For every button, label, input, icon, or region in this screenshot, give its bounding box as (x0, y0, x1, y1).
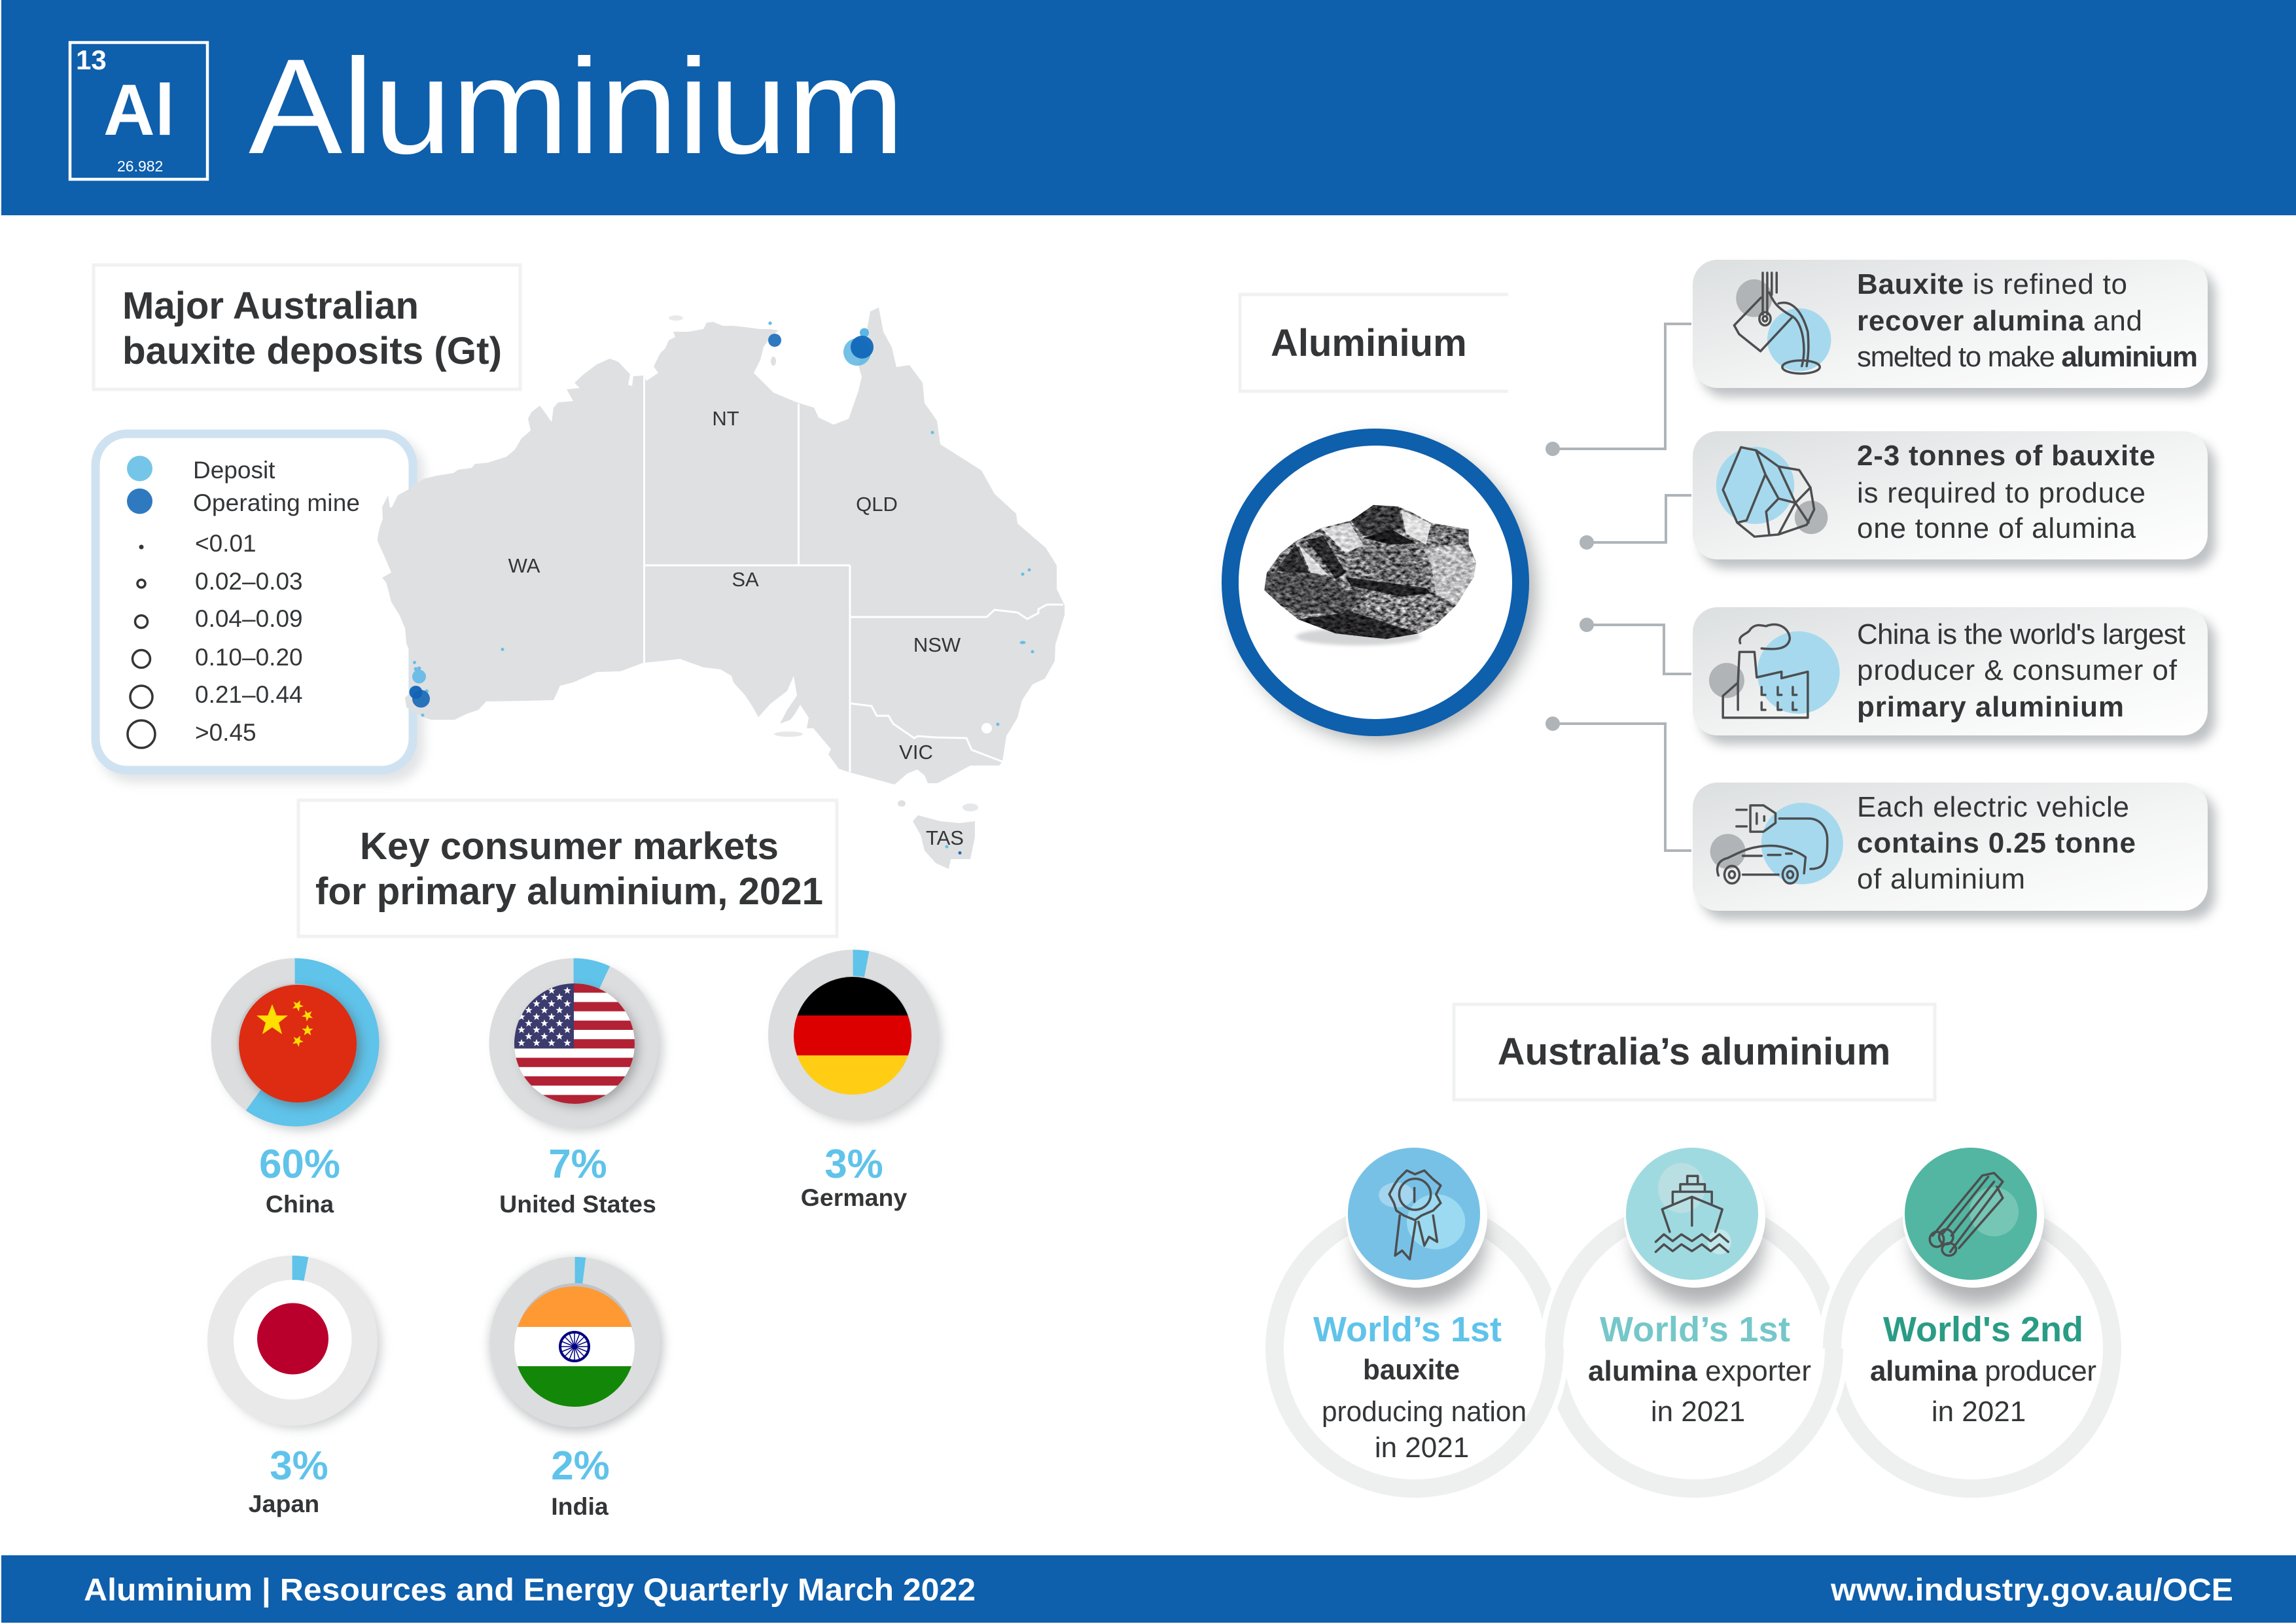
donut: China 60%: China (266, 1190, 334, 1218)
donut: United States 7%: United States (499, 1190, 656, 1218)
periodic table element box: Al (103, 70, 175, 150)
flag: China (239, 985, 357, 1103)
card: China largest: primary aluminium (1857, 691, 2124, 723)
deposit markers (410, 321, 1034, 855)
card: electric vehicle: of aluminium (1857, 863, 2025, 895)
stat: alumina exporter: World’s 1st (1600, 1310, 1790, 1349)
legend panel: 0.10–0.20 (195, 644, 303, 671)
state labels: QLD (856, 493, 898, 516)
flag: India (514, 1286, 635, 1407)
stat: alumina exporter (1588, 1146, 1811, 1428)
icon: aluminium tubes (1930, 1173, 2019, 1256)
donut: Japan 3%: 3% (270, 1443, 328, 1489)
donut: Germany 3%: 3% (824, 1142, 883, 1187)
heading: major Australian bauxite deposits: bauxite deposits (Gt) (122, 330, 502, 372)
card: bauxite refined: Bauxite is refined to (1857, 268, 2127, 300)
heading: key consumer markets: Key consumer markets (360, 825, 779, 868)
donut: Japan 3%: Japan (249, 1490, 319, 1517)
flag: United States (514, 983, 635, 1104)
flag: Japan (257, 1303, 328, 1374)
state labels: NT (712, 407, 739, 430)
periodic table element box (70, 43, 207, 179)
heading: major Australian bauxite deposits: Major Australian (122, 285, 419, 327)
card: bauxite refined (1693, 260, 2216, 397)
stat: bauxite producer: bauxite (1363, 1354, 1460, 1386)
card: China largest: China is the world's largest (1857, 618, 2185, 650)
stat: alumina producer: World's 2nd (1883, 1310, 2083, 1349)
connectors (1545, 324, 1691, 851)
heading: key consumer markets: for primary aluminium, 2021 (315, 870, 823, 913)
stat: bauxite producer (1313, 1146, 1527, 1464)
donut: United States 7%: 7% (548, 1142, 607, 1187)
stat: bauxite producer: World’s 1st (1313, 1310, 1502, 1349)
donut: India 2% (490, 1259, 663, 1520)
periodic table element box: 26.982 (117, 158, 163, 175)
header band (1, 0, 2296, 215)
heading: Aluminium: Aluminium (1271, 322, 1467, 364)
legend panel: Operating mine (193, 489, 360, 516)
legend panel (96, 434, 424, 783)
stat: bauxite producer: in 2021 (1375, 1432, 1469, 1464)
stat: alumina producer: alumina producer (1870, 1355, 2096, 1387)
stat: alumina producer: in 2021 (1932, 1396, 2026, 1428)
heading: key consumer markets (298, 800, 837, 936)
card: tonnes of bauxite: one tonne of alumina (1857, 512, 2136, 544)
state labels: WA (508, 554, 540, 577)
legend panel: 0.21–0.44 (195, 681, 303, 708)
donut: United States 7% (497, 965, 663, 1218)
footer band (1, 1555, 2296, 1623)
icon: factory (1709, 624, 1840, 718)
icon: ribbon (1379, 1171, 1465, 1260)
donut: Japan 3% (215, 1262, 381, 1517)
state labels (508, 407, 964, 849)
footer band: www.industry.gov.au/OCE (1830, 1573, 2233, 1608)
legend panel: 0.04–0.09 (195, 605, 303, 632)
legend panel: 0.02–0.03 (195, 568, 303, 595)
stat: bauxite producer: producing nation (1322, 1396, 1527, 1428)
state labels: NSW (913, 633, 961, 656)
card: electric vehicle (1693, 783, 2216, 920)
legend panel: Deposit (193, 457, 275, 484)
card: bauxite refined: smelted to make aluminium (1857, 341, 2198, 373)
icon: plug and car (1710, 803, 1843, 885)
icon: rock (1716, 447, 1828, 537)
card: tonnes of bauxite (1693, 431, 2216, 569)
title: Aluminium (249, 31, 904, 182)
map of Australia (378, 308, 1065, 869)
state labels: VIC (899, 741, 933, 764)
legend panel: <0.01 (195, 530, 256, 557)
card: tonnes of bauxite: 2-3 tonnes of bauxite (1857, 440, 2155, 472)
card: China largest (1693, 607, 2216, 745)
footer band: Aluminium | Resources and Energy Quarterly March 2022 (84, 1573, 976, 1608)
rock photo (1264, 505, 1476, 645)
heading: Australia's aluminium: Australia’s aluminium (1498, 1031, 1890, 1073)
icon: pouring crucible (1734, 273, 1831, 374)
icon: ship (1655, 1163, 1731, 1254)
card: electric vehicle: contains 0.25 tonne (1857, 827, 2136, 859)
heading: Australia's aluminium (1454, 1004, 1935, 1100)
donut: India 2%: India (551, 1492, 609, 1520)
aluminium rock in blue ring (1230, 437, 1536, 743)
heading: major Australian bauxite deposits (94, 265, 520, 389)
card: China largest: producer & consumer of (1857, 654, 2178, 686)
donut: China 60% (219, 964, 385, 1218)
card: bauxite refined: recover alumina and (1857, 305, 2142, 337)
stat: alumina exporter: alumina exporter (1588, 1355, 1811, 1387)
donut: Germany 3% (775, 957, 942, 1211)
stat: alumina exporter: in 2021 (1651, 1396, 1745, 1428)
legend panel: >0.45 (195, 719, 256, 746)
donut: China 60%: 60% (259, 1142, 340, 1187)
periodic table element box: 13 (76, 44, 107, 75)
stat: alumina producer (1870, 1146, 2096, 1428)
donut: India 2%: 2% (551, 1443, 610, 1489)
card: electric vehicle: Each electric vehicle (1857, 791, 2129, 823)
donut: Germany 3%: Germany (801, 1184, 907, 1211)
state labels: TAS (926, 826, 964, 849)
interlocking rings (1275, 1209, 2112, 1489)
heading: Aluminium (1240, 294, 1508, 391)
state labels: SA (732, 568, 759, 591)
card: tonnes of bauxite: is required to produce (1857, 477, 2146, 509)
flag: Germany (794, 977, 911, 1095)
